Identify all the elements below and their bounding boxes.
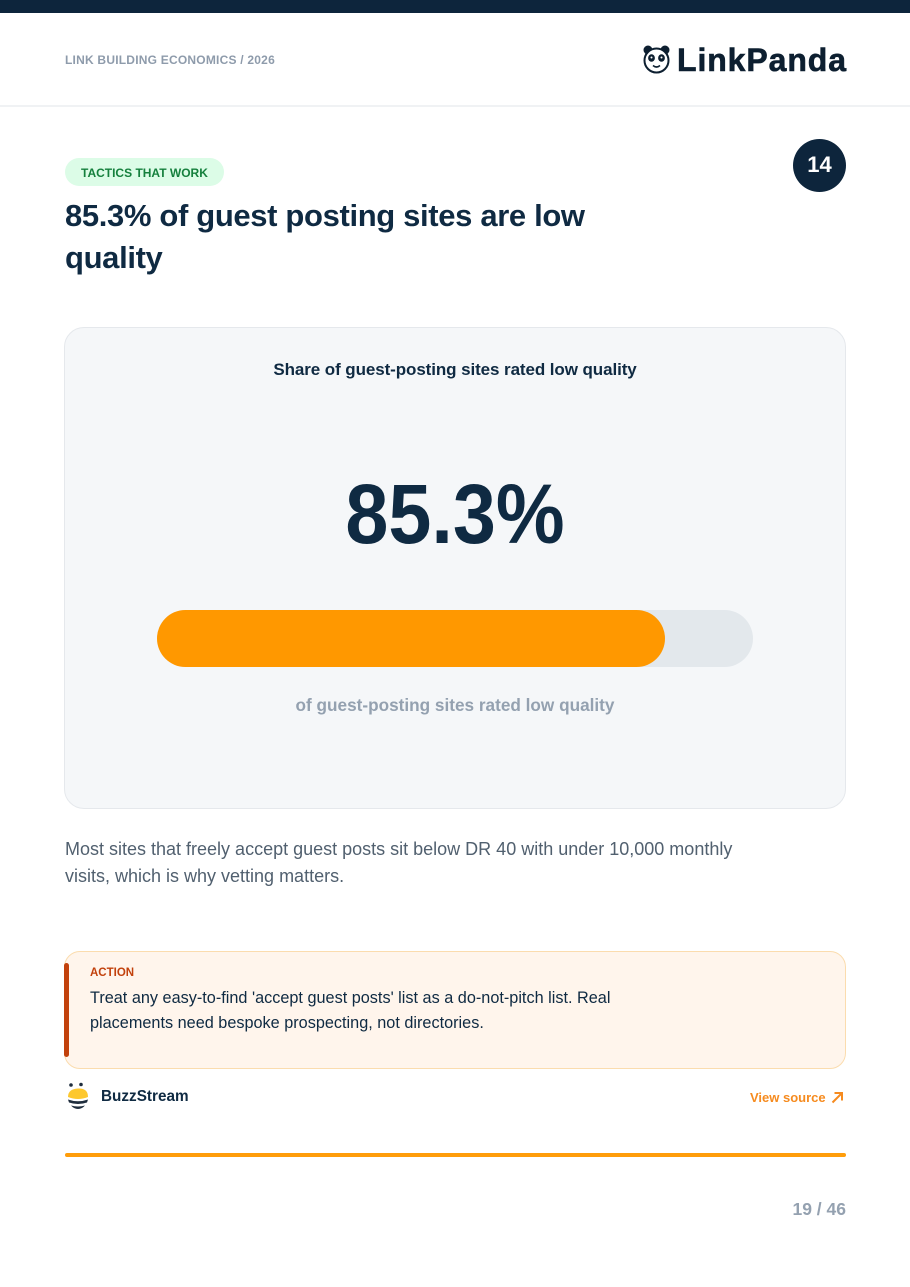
logo: LinkPanda <box>644 42 847 78</box>
page number: 19 / 46 <box>792 1199 846 1219</box>
tag text: TACTICS THAT WORK <box>81 166 208 180</box>
link text: View source <box>750 1090 826 1105</box>
progress fill <box>157 610 665 667</box>
title: quality <box>65 240 162 275</box>
big stat: 85.3% <box>345 467 565 561</box>
progress bar <box>157 610 753 667</box>
accent bar <box>64 963 69 1057</box>
title: 85.3% of guest posting sites are low <box>65 198 585 233</box>
tag pill <box>65 158 224 186</box>
source name: BuzzStream <box>101 1088 189 1105</box>
view source link <box>750 1090 843 1105</box>
bar caption: of guest-posting sites rated low quality <box>296 695 614 715</box>
description: visits, which is why vetting matters. <box>65 866 344 886</box>
header label: LINK BUILDING ECONOMICS / 2026 <box>65 53 275 67</box>
source row <box>68 1082 843 1109</box>
description: Most sites that freely accept guest posts sit below DR 40 with under 10,000 monthly <box>65 839 732 859</box>
icon: panda <box>644 46 670 74</box>
orange rule <box>65 1153 846 1157</box>
slide number badge: 14 <box>807 152 832 177</box>
icon: arrow <box>832 1092 843 1104</box>
header <box>0 13 910 107</box>
slide number badge <box>793 139 846 192</box>
panel: action callout <box>64 951 846 1069</box>
action text <box>90 989 610 1032</box>
action label: ACTION <box>90 967 134 979</box>
icon: BuzzStream bee <box>68 1082 88 1109</box>
action text: placements need bespoke prospecting, not directories. <box>90 1014 484 1032</box>
chart heading: Share of guest-posting sites rated low quality <box>273 360 637 379</box>
description <box>65 839 732 886</box>
top bar <box>0 0 910 13</box>
title <box>65 198 585 275</box>
logo wordmark: LinkPanda <box>677 42 847 78</box>
action text: Treat any easy-to-find 'accept guest posts' list as a do-not-pitch list. Real <box>90 989 610 1007</box>
panel: chart card <box>64 327 846 809</box>
